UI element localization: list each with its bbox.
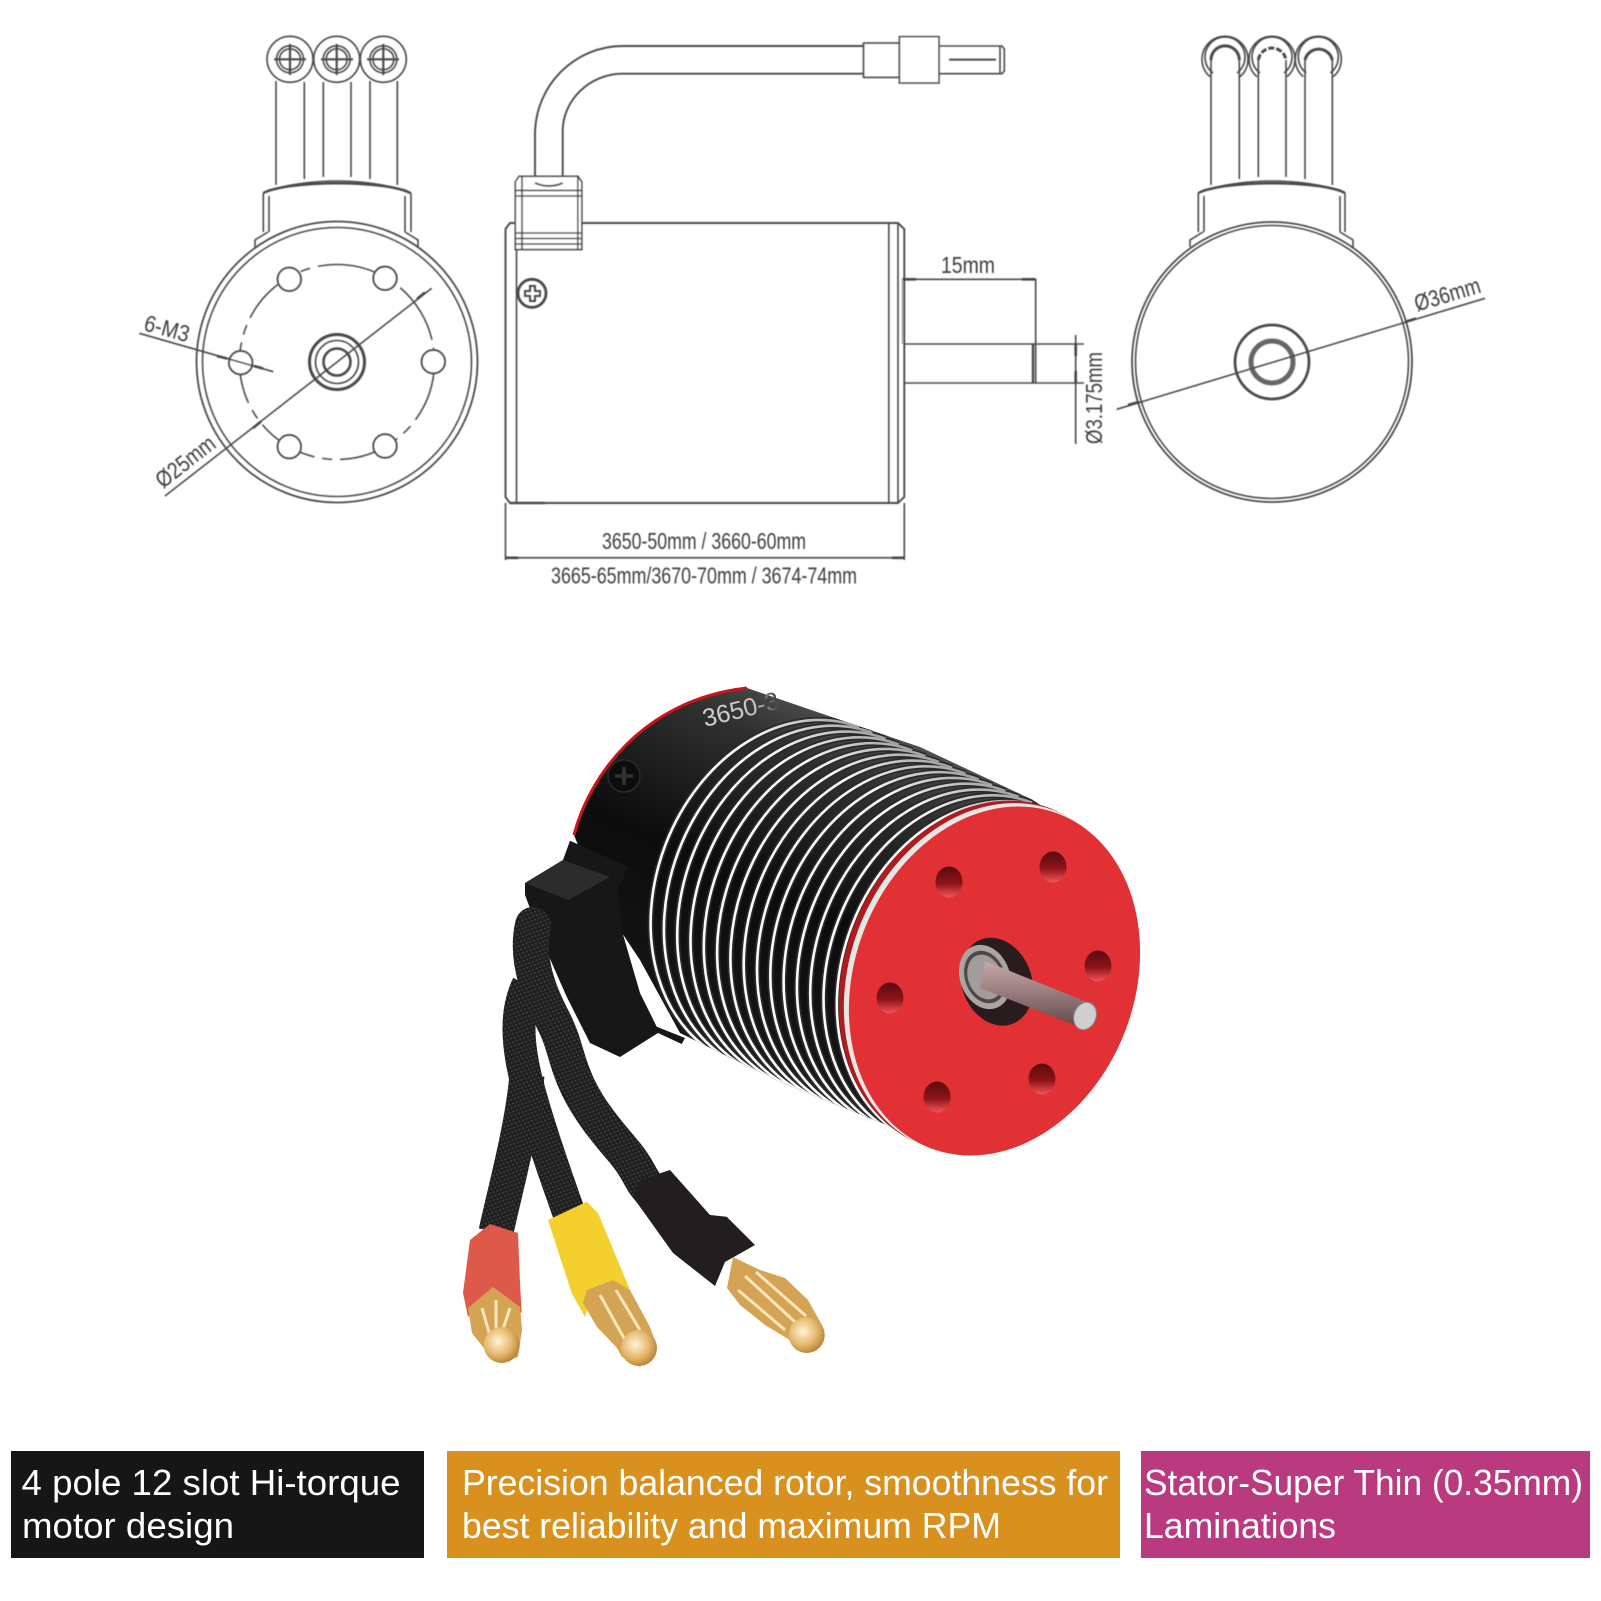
dimension: 6-M3 <box>139 310 273 372</box>
callout: stator laminations <box>1141 1451 1590 1558</box>
dimension: shaft diameter 3.175mm <box>1033 335 1107 444</box>
threaded mounting holes <box>876 852 1112 1112</box>
red end face with silver rim <box>789 758 1189 1198</box>
motor body outline: side view <box>506 223 904 503</box>
drawing: rear view <box>1117 36 1485 502</box>
shaft: side view <box>904 344 1033 383</box>
housing: front view outer circles <box>196 222 478 502</box>
photo: brushless motor illustration <box>463 677 1189 1367</box>
dimension: shaft diameter 3.175mm: Ø3.175mm <box>1081 352 1107 444</box>
cable clip: black plastic strain relief <box>525 841 685 1057</box>
callout: balanced rotor: Precision balanced rotor, smoothness for <box>462 1462 1108 1503</box>
heat shrink: black <box>633 1170 755 1286</box>
dimension: 36mm diameter: Ø36mm <box>1411 272 1484 316</box>
dimension: 25mm bolt circle <box>150 288 432 496</box>
motor body with cooling fins <box>574 677 1050 1142</box>
gold connector: black wire <box>727 1257 825 1353</box>
braided wires <box>496 925 650 1232</box>
dimension: 25mm bolt circle: Ø25mm <box>150 430 220 493</box>
heat shrink: red <box>463 1224 522 1317</box>
callout: motor design: motor design <box>22 1505 234 1546</box>
drawing: front view with mounting holes <box>139 36 478 503</box>
dimension: motor length: 3665-65mm/3670-70mm / 3674-74mm <box>551 562 857 588</box>
connector block: rear view <box>1190 181 1353 247</box>
dimension: 6-M3: 6-M3 <box>141 310 193 347</box>
cable: bent lead with bullet connector <box>535 37 1004 181</box>
heat shrink: yellow <box>548 1202 630 1317</box>
callout: stator laminations: Laminations <box>1144 1505 1336 1546</box>
dimension: motor length <box>506 503 904 588</box>
wires: three rear view leads <box>1211 60 1332 185</box>
callout: balanced rotor: best reliability and maximum RPM <box>462 1505 1001 1546</box>
terminals: rear open connector loops <box>1202 36 1341 77</box>
cable clip: side view <box>515 176 582 250</box>
icon: housing screw <box>608 760 640 792</box>
gold connector: yellow wire <box>583 1280 657 1367</box>
callout: stator laminations: Stator-Super Thin (0.35mm) <box>1144 1462 1583 1503</box>
dimension: motor length: 3650-50mm / 3660-60mm <box>602 528 806 554</box>
housing: rear view outer circles <box>1132 222 1412 502</box>
wires: three front view leads <box>276 81 397 185</box>
model number on housing: 3650-3 <box>700 687 782 733</box>
bolt circle with six M3 holes <box>229 264 445 460</box>
drawing: side view with dimensions <box>506 37 1107 588</box>
callout: motor design: 4 pole 12 slot Hi-torque <box>22 1462 400 1503</box>
bearing: front view center rings <box>310 334 364 390</box>
callout: motor design <box>11 1451 424 1558</box>
connector block: front view <box>255 181 418 247</box>
icon: mounting screw <box>518 279 546 307</box>
gold connector: red wire <box>468 1287 522 1363</box>
dimension: 15mm shaft length <box>902 252 1036 383</box>
motor shaft <box>980 961 1100 1033</box>
terminals: three front connector circles <box>267 36 406 82</box>
bearing <box>948 927 1045 1036</box>
callout: balanced rotor <box>447 1451 1120 1558</box>
dimension: 15mm shaft length: 15mm <box>941 252 995 278</box>
bearing: rear view center rings <box>1235 325 1309 399</box>
cooling fins <box>648 717 1040 1125</box>
dimension: 36mm diameter <box>1117 272 1485 409</box>
